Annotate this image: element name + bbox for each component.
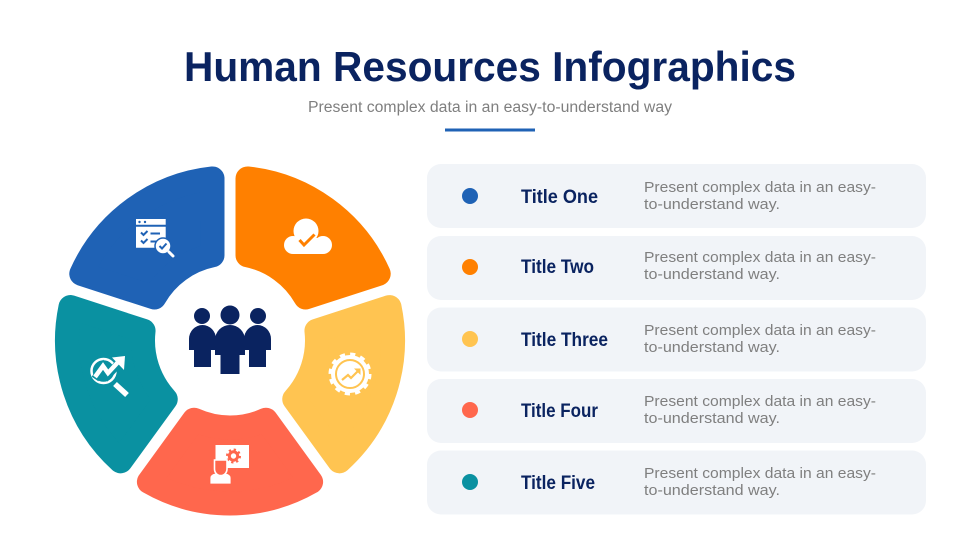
segment: teal (14, 288, 191, 461)
description one: Present complex data in an easy- (644, 179, 876, 196)
description five: Present complex data in an easy- (644, 465, 876, 482)
description three: to-understand way. (644, 339, 780, 356)
icon: checklist with magnifier (136, 219, 173, 256)
title underline (445, 128, 535, 132)
icon: magnifier with growth arrow (92, 356, 127, 395)
description three: Present complex data in an easy- (644, 322, 876, 339)
heading: title five: Title Five (521, 472, 595, 494)
marker: orange dot (462, 259, 478, 275)
icon: team of people (189, 306, 271, 374)
panel: row five (427, 450, 926, 514)
description two: Present complex data in an easy- (644, 249, 876, 266)
heading: title two: Title Two (521, 256, 594, 278)
marker: yellow dot (462, 331, 478, 347)
description five: to-understand way. (644, 482, 780, 499)
description four: Present complex data in an easy- (644, 393, 876, 410)
description two: to-understand way. (644, 266, 780, 283)
panel: row two (427, 236, 926, 300)
marker: teal dot (462, 474, 478, 490)
panel: row one (427, 164, 926, 228)
icon: gear with rising arrow (330, 354, 370, 394)
panel: row three (427, 308, 926, 372)
icon: cloud with check (284, 218, 332, 254)
panel: row four (427, 379, 926, 443)
donut chart: five segments (14, 149, 430, 551)
description one: to-understand way. (644, 196, 780, 213)
title: Human Resources Infographics (184, 43, 796, 90)
icon: presenter with gear board (210, 445, 249, 484)
heading: title three: Title Three (521, 329, 608, 351)
segment: orange (248, 178, 379, 298)
segment: yellow (276, 307, 430, 469)
subtitle: Present complex data in an easy-to-understand way (308, 99, 672, 116)
segment: coral (135, 386, 311, 551)
segment: blue (81, 149, 235, 311)
marker: coral dot (462, 402, 478, 418)
marker: blue dot (462, 188, 478, 204)
heading: title four: Title Four (521, 400, 598, 422)
description four: to-understand way. (644, 410, 780, 427)
heading: title one: Title One (521, 186, 598, 208)
